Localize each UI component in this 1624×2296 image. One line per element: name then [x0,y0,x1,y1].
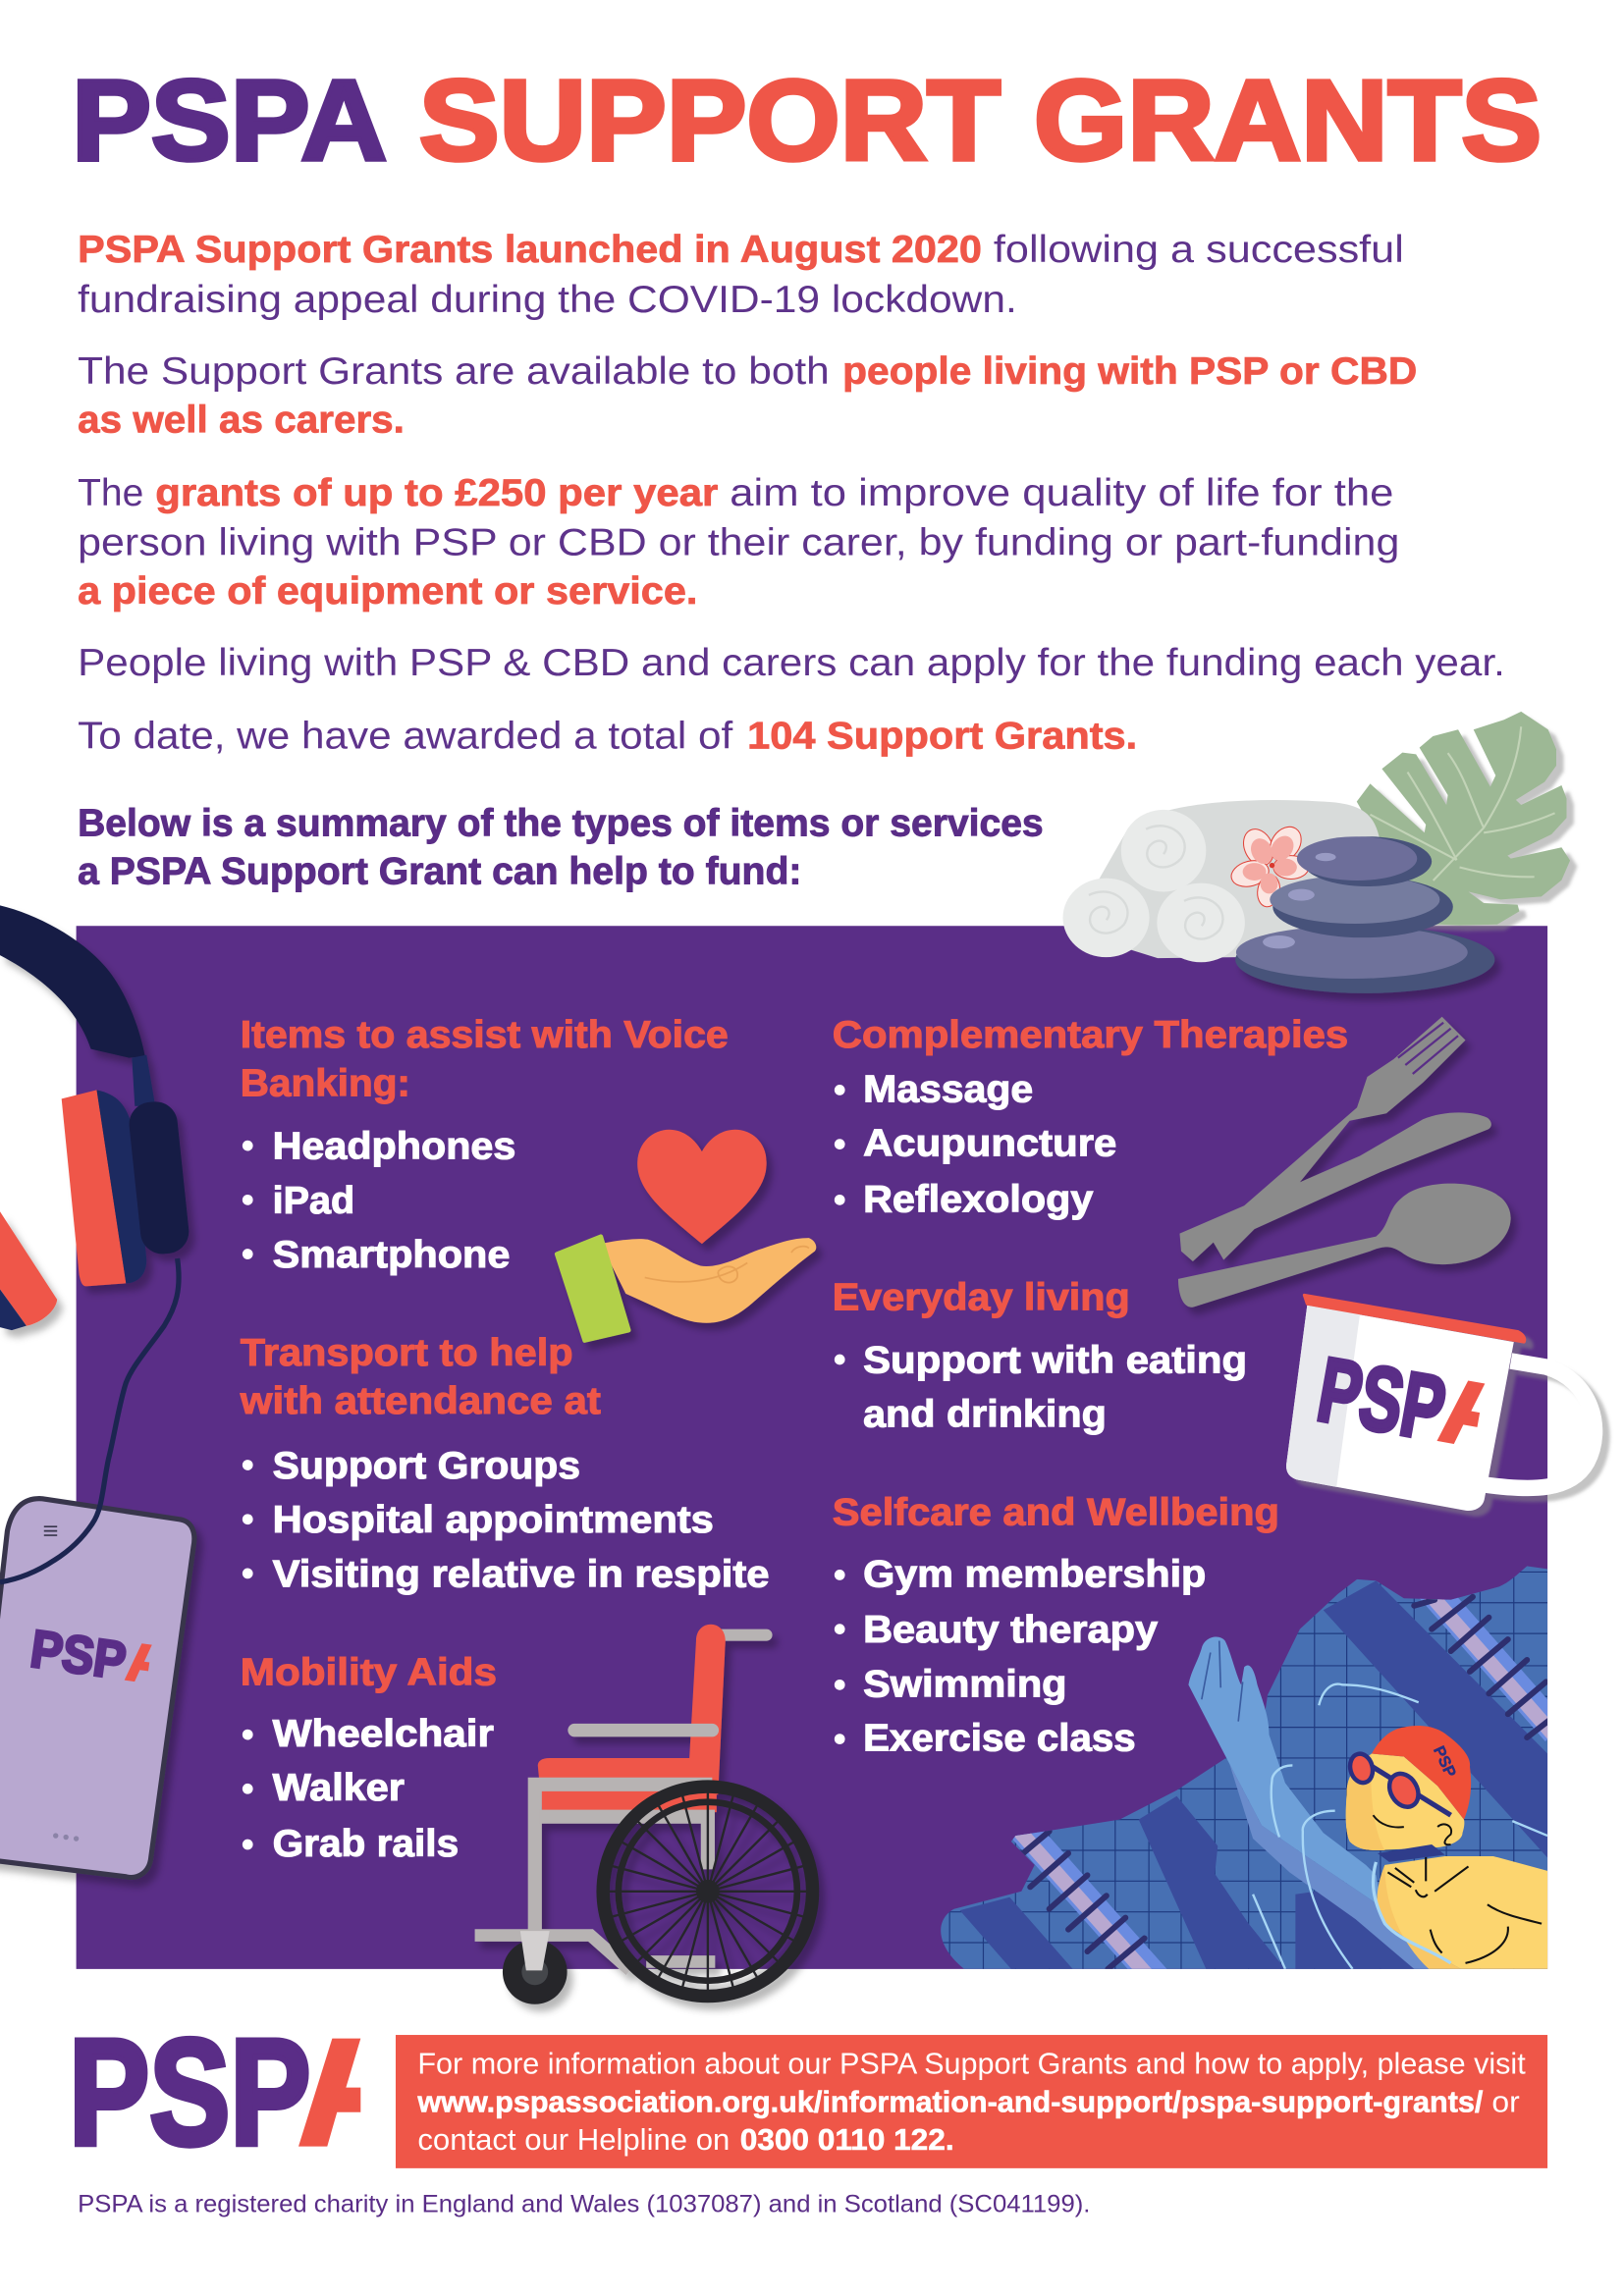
pool grid [923,1553,1547,1969]
panel: purple background [77,926,1547,1969]
panel text: voice banking: Smartphone [273,1234,510,1276]
summary heading: Below is a summary of the types of items or services [78,802,1044,844]
intro text block: person living with PSP or CBD or their carer, by funding or part-funding [78,522,1399,564]
panel text: everyday living: Support with eating [863,1339,1247,1381]
callout: more information: 0300 0110 122. [740,2123,954,2157]
intro text block: as well as carers. [78,399,405,441]
panel text: complementary therapies: Reflexology [863,1178,1094,1220]
intro text block: People living with PSP & CBD and carers can apply for the funding each year. [78,642,1505,684]
goggles [1370,1765,1451,1815]
panel text: everyday living [833,1276,1247,1436]
panel text: complementary therapies [833,1014,1348,1220]
swim cap [1372,1726,1471,1820]
panel text: selfcare and wellbeing: Swimming [863,1663,1067,1705]
panel text: transport: with attendance at [240,1380,601,1422]
intro text block: a piece of equipment or service. [78,570,697,613]
icon: wheelchair [475,1625,813,2004]
summary heading: a PSPA Support Grant can help to fund: [78,851,801,893]
panel text: complementary therapies: Massage [863,1068,1033,1110]
panel text: transport: Hospital appointments [273,1499,714,1541]
swimmer head: PSP [1430,1743,1459,1781]
icon: heart [637,1130,767,1244]
panel text: voice banking: iPad [273,1180,354,1222]
panel text: everyday living: and drinking [863,1394,1107,1436]
icon: towels [1063,800,1407,962]
callout: more information: contact our Helpline on [417,2123,730,2157]
panel text: mobility aids [241,1651,497,1865]
title: SUPPORT GRANTS [419,57,1542,185]
panel text: selfcare and wellbeing [833,1492,1279,1760]
panel text: selfcare and wellbeing: Selfcare and Wellbeing [833,1492,1279,1534]
fork and knife [1179,1017,1491,1261]
icon: enamel mug [1286,1295,1595,1511]
intro text block: 104 Support Grants. [747,716,1137,758]
icon: monstera leaf [1357,712,1570,926]
intro text block: grants of up to £250 per year [155,472,718,514]
panel text: voice banking: Items to assist with Voice [241,1014,729,1056]
callout: more information [396,2035,1547,2168]
intro text block: PSPA Support Grants launched in August 2020 [78,229,982,271]
swimmer body [1373,1850,1553,1969]
icon: cutlery [1178,1017,1511,1308]
panel text: voice banking [241,1014,729,1276]
callout: more information: www.pspassociation.org.uk/information-and-support/pspa-support-grants/ [416,2085,1484,2118]
lane rope right [1414,1586,1556,1737]
icon: flower [1228,821,1309,909]
panel text: transport: Support Groups [273,1445,580,1487]
panel text: transport: Visiting relative in respite [273,1553,770,1595]
intro text block [78,229,1505,758]
spoon [1178,1184,1511,1308]
icon: phone [0,1499,194,1878]
panel text: voice banking: Headphones [273,1126,515,1168]
icon: headphone cable [0,1258,179,1582]
charity note: PSPA is a registered charity in England and Wales (1037087) and in Scotland (SC041199). [78,2192,1090,2218]
panel text: voice banking: Banking: [241,1062,410,1104]
callout: more information: or [1491,2085,1520,2118]
phone menu icon [44,1526,57,1535]
mug logo: PSP [1311,1338,1453,1461]
panel text: complementary therapies: Complementary Therapies [833,1014,1348,1056]
panel text: everyday living: Everyday living [833,1276,1130,1318]
intro text block: To date, we have awarded a total of [78,716,732,758]
intro text block: The Support Grants are available to both [78,350,830,393]
panel text: selfcare and wellbeing: Exercise class [863,1718,1136,1760]
panel text: mobility aids: Mobility Aids [241,1651,497,1693]
phone dots [53,1833,79,1842]
panel text: selfcare and wellbeing: Beauty therapy [863,1609,1159,1651]
icon: hand [557,1237,816,1341]
swimmer head [1346,1726,1471,1862]
intro text block: following a successful [994,229,1404,271]
title: PSPA [72,57,387,185]
panel text: mobility aids: Wheelchair [273,1713,494,1755]
callout: more information: For more information about our PSPA Support Grants and how to apply, please visit [417,2048,1526,2081]
panel text: mobility aids: Walker [273,1767,405,1809]
panel text: transport [240,1332,770,1595]
phone logo: PSP [27,1620,130,1691]
icon: massage stones [1235,836,1494,993]
intro text block: The [78,472,143,514]
panel text: transport: Transport to help [241,1332,573,1374]
panel text: complementary therapies: Acupuncture [863,1123,1116,1165]
intro text block: people living with PSP or CBD [842,350,1417,393]
intro text block: aim to improve quality of life for the [730,472,1393,514]
panel text: selfcare and wellbeing: Gym membership [863,1553,1206,1595]
intro text block: fundraising appeal during the COVID-19 lockdown. [78,279,1017,321]
lane rope left [1015,1824,1158,1984]
wheel [603,1787,813,1996]
panel text: mobility aids: Grab rails [273,1823,459,1865]
swimmer arm [1188,1636,1547,1969]
dark pool stripes [960,1580,1547,1969]
PSPA logo: PSP [69,2007,310,2176]
icon: swimmer in pool [941,1567,1547,1969]
icon: headphones [0,905,191,1330]
summary heading [78,802,1044,893]
